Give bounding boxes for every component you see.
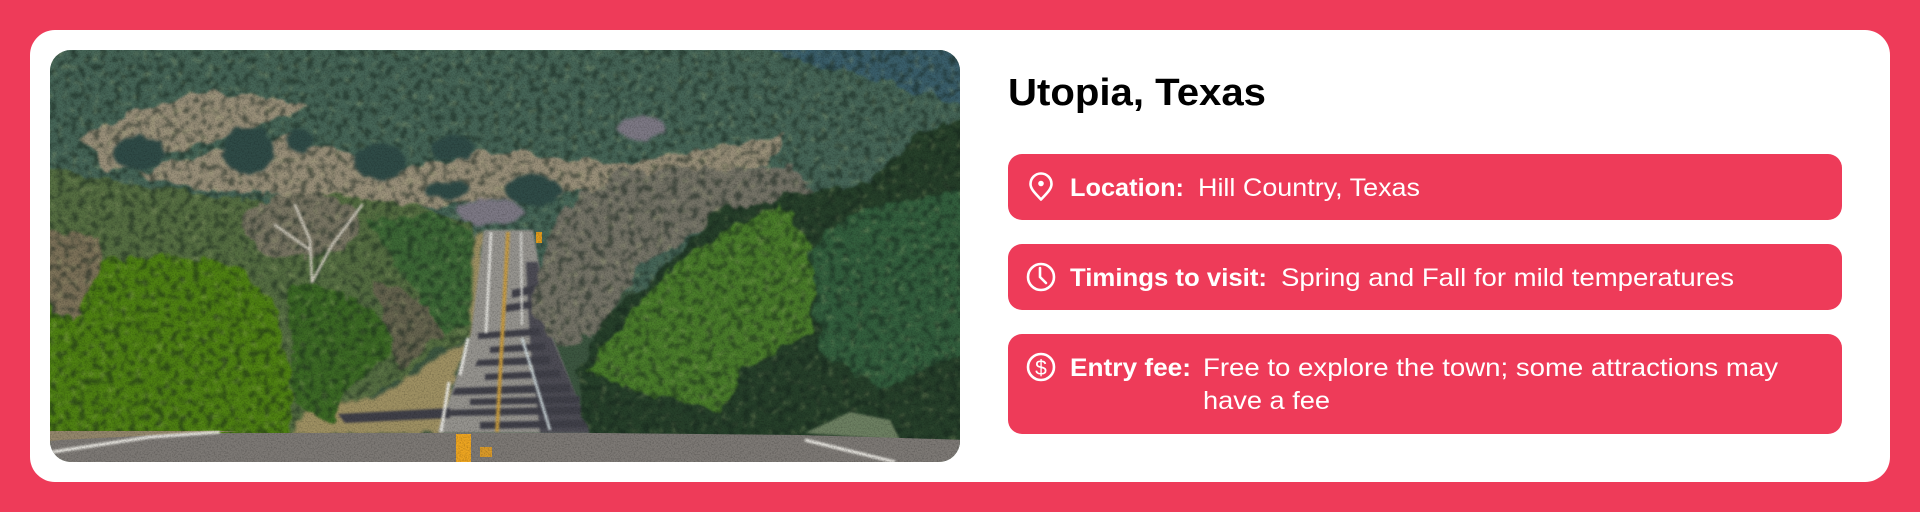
entry fee label: Entry fee: <box>1070 354 1191 382</box>
location value: Hill Country, Texas <box>1198 174 1420 202</box>
road shadows <box>338 262 592 433</box>
location label: Location: <box>1070 174 1184 202</box>
grey leafless trees right <box>530 165 815 348</box>
timings value: Spring and Fall for mild temperatures <box>1281 264 1734 292</box>
far road <box>438 230 590 433</box>
road markings <box>441 232 550 432</box>
foreground road <box>50 433 960 462</box>
hillside base <box>50 50 960 292</box>
info bar: timings <box>1008 244 1842 310</box>
road sign <box>536 232 542 243</box>
icon: dollar <box>1028 354 1054 380</box>
entry fee value <box>1203 354 1779 415</box>
foreground edge lines <box>52 432 895 462</box>
yellow dash <box>480 447 492 457</box>
yellow centre line <box>456 434 471 462</box>
dark green slope by road <box>370 212 478 335</box>
dry grass verge <box>290 230 484 435</box>
bare tree branches <box>275 205 362 282</box>
photo grain <box>50 50 960 462</box>
left mid hillside <box>30 165 480 436</box>
icon: clock <box>1028 264 1054 290</box>
photo base <box>50 50 960 462</box>
darker green bush <box>292 285 392 425</box>
teal foliage far right <box>806 190 960 390</box>
grey tan patch left <box>50 229 103 321</box>
icon: dollar: $ <box>1035 357 1047 380</box>
grey brown patch beside road <box>370 280 445 370</box>
info bar: entry fee <box>1008 334 1842 434</box>
bare grey tree clump <box>242 193 358 257</box>
dark green woodland <box>578 110 990 445</box>
info bar: location <box>1008 154 1842 220</box>
bright foliage right <box>585 202 818 412</box>
entry fee value: Free to explore the town; some attractions may <box>1203 354 1779 382</box>
photo: Texas hill country road <box>50 50 960 462</box>
bright green juniper <box>30 255 292 445</box>
entry fee value: have a fee <box>1203 387 1330 415</box>
timings label: Timings to visit: <box>1070 264 1267 292</box>
purple-grey shrubs <box>456 116 666 225</box>
foreground shoulder <box>50 431 239 441</box>
tan slopes <box>78 92 785 208</box>
title: Utopia, Texas <box>1008 72 1266 114</box>
distant blue ridge <box>772 50 960 104</box>
icon: map pin <box>1030 174 1052 200</box>
dry patch bottom right <box>805 412 900 440</box>
dark shrub clusters on hillside <box>114 126 561 206</box>
